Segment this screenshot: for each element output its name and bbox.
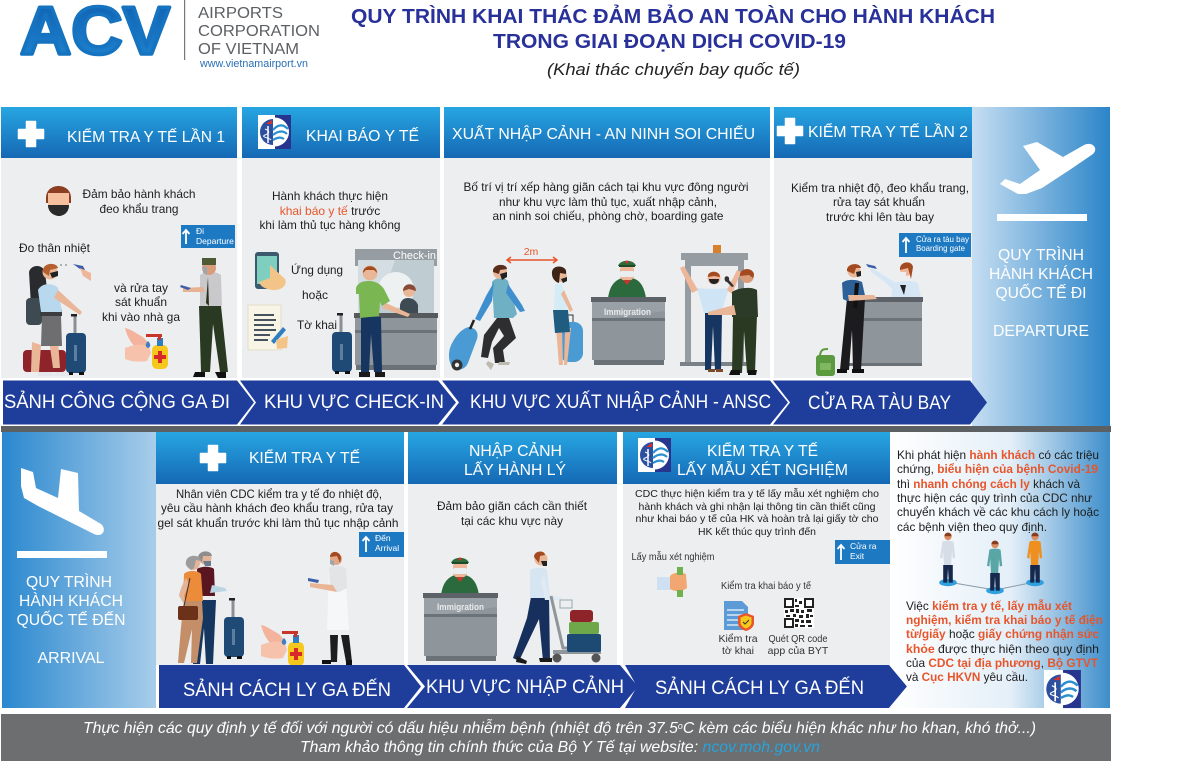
footer notice [1, 714, 1111, 761]
sign: exit: Exit [850, 551, 865, 561]
panel: khai bao y te: KHAI BÁO Y TẾ [306, 126, 419, 145]
figure: traveler with thermometer [23, 264, 91, 376]
chevron: khu vuc check-in [240, 380, 456, 424]
chevron: sanh cach ly ga den 2: SẢNH CÁCH LY GA ĐẾN [655, 677, 864, 699]
text block: regulations [906, 598, 1103, 684]
panel: arrival side label: QUY TRÌNH [26, 574, 112, 591]
panel: khai bao y te [242, 107, 440, 378]
figure: doctor [308, 552, 352, 665]
sign: departure: Đi [196, 226, 204, 236]
figure: staff with thermometer [866, 262, 921, 297]
text block: detection notes: chứng, biểu hiện của bệnh Covid-19 [897, 462, 1098, 476]
panel: departure side label: DEPARTURE [993, 323, 1089, 340]
sign: boarding gate: Cửa ra tàu bay [916, 234, 970, 244]
panel: kiem tra y te lan 1: Đo thân nhiệt [19, 241, 91, 255]
panel: nhap canh lay hanh ly [408, 432, 617, 665]
icon: cross [200, 446, 226, 470]
figure: woman with luggage [552, 266, 583, 365]
figure: man with luggage [449, 265, 525, 370]
icon: declaration form [248, 305, 288, 350]
text block: detection notes: thì nhanh chóng cách ly khách và [897, 477, 1080, 491]
text block: regulations: nghiệm, kiểm tra khai báo y tế điện [906, 613, 1103, 627]
panel: kiem tra y te lan 1: và rửa tay [114, 281, 168, 295]
panel: kiem tra y te lan 2: Kiểm tra nhiệt độ, đeo khẩu trang, [791, 181, 969, 195]
chevron: sanh cach ly ga den [159, 665, 421, 708]
icon: QR code [784, 598, 814, 628]
title: QUY TRÌNH KHAI THÁC ĐẢM BẢO AN TOÀN CHO HÀNH KHÁCH [351, 5, 995, 28]
icon: departing plane [1000, 142, 1095, 194]
panel: kiem tra y te lay mau xet nghiem: tờ khai [722, 645, 754, 657]
text block: regulations: Việc kiểm tra y tế, lấy mẫu xét [906, 598, 1072, 613]
panel: kiem tra y te lan 2: trước khi lên tàu bay [826, 210, 934, 224]
chevron: sanh cach ly ga den: SẢNH CÁCH LY GA ĐẾN [183, 679, 391, 701]
panel: kiem tra y te lay mau xet nghiem: như khai báo y tế của HK và hoàn trả lại giấy tờ cho [636, 513, 879, 525]
panel: kiem tra y te lan 2: rửa tay sát khuẩn [833, 195, 925, 209]
text block: detection notes: thực hiện các quy trình của CDC như [897, 491, 1092, 505]
text block: detection notes: các bệnh viện theo quy định. [897, 520, 1047, 534]
footer notice: C kèm các biểu hiện khác như ho khan, khó thở...) [683, 719, 1036, 737]
title: TRONG GIAI ĐOẠN DỊCH COVID-19 [493, 31, 846, 53]
icon: arriving plane [21, 468, 104, 535]
panel: arrival side label: HÀNH KHÁCH [19, 593, 123, 610]
panel: kiem tra y te den: Nhân viên CDC kiểm tra y tế đo nhiệt độ, [176, 487, 382, 501]
panel: kiem tra y te lan 2: KIỂM TRA Y TẾ LẦN 2 [808, 122, 968, 141]
chevron: khu vuc nhap canh [407, 665, 638, 708]
panel: departure side label: HÀNH KHÁCH [989, 266, 1093, 283]
chevron: khu vuc xuat nhap canh: KHU VỰC XUẤT NHẬP CẢNH - ANSC [470, 391, 771, 413]
icon: cross [778, 118, 802, 144]
panel: kiem tra y te lay mau xet nghiem: Lấy mẫu xét nghiệm [632, 550, 714, 563]
icon: hand washing [125, 328, 168, 369]
panel: kiem tra y te lan 1: đeo khẩu trang [100, 202, 178, 216]
title [351, 5, 995, 53]
header: ACV logo: CORPORATION [198, 23, 320, 40]
panel: kiem tra y te lay mau xet nghiem: hành khách và ghi nhận lại thông tin cần thiết cũng [638, 501, 876, 513]
panel: kiem tra y te lay mau xet nghiem: Quét QR code [768, 633, 828, 645]
immigration desk: Immigration [437, 602, 484, 612]
footer notice: Thực hiện các quy định y tế đối với người có dấu hiệu nhiễm bệnh (nhiệt độ trên 37.5 [83, 720, 686, 737]
panel: xuat nhap canh - an ninh soi chieu: an ninh soi chiếu, phòng chờ, boarding gate [492, 209, 724, 223]
figure: three isolated people [939, 533, 1044, 594]
panel: kiem tra y te lan 1: khi vào nhà ga [102, 310, 180, 324]
panel: kiem tra y te den [156, 432, 404, 666]
panel: arrival side label [2, 432, 156, 708]
figure: passenger at check-in [356, 266, 410, 377]
panel: kiem tra y te lan 2 [774, 107, 972, 378]
panel: kiem tra y te lay mau xet nghiem: app của BYT [768, 645, 829, 657]
text block: regulations: và Cục HKVN yêu cầu. [906, 670, 1028, 684]
icon: hand washing [261, 625, 304, 666]
panel: kiem tra y te den: gel sát khuẩn trước khi làm thủ tục nhập cảnh [158, 516, 398, 530]
text block: detection notes: Khi phát hiện hành khách có các triệu [897, 448, 1099, 462]
chevron: khu vuc xuat nhap canh [442, 380, 788, 424]
check-in counter: Check-in [393, 250, 436, 262]
text block: detection notes [897, 448, 1099, 534]
panel: xuat nhap canh - an ninh soi chieu: như khu vực làm thủ tục, xuất nhập cảnh, [499, 195, 717, 209]
chevron: cua ra tau bay [773, 380, 987, 424]
chevron: sanh cach ly ga den 2 [625, 665, 907, 708]
figure: security officer [708, 269, 758, 375]
text block: regulations: khỏe được thực hiện theo quy định [906, 642, 1099, 656]
panel: kiem tra y te lay mau xet nghiem [623, 432, 890, 665]
panel: xuat nhap canh - an ninh soi chieu: Bố trí vị trí xếp hàng giãn cách tại khu vực đông người [464, 180, 748, 194]
panel: kiem tra y te lan 1: KIỂM TRA Y TẾ LẦN 1 [67, 127, 225, 146]
panel: nhap canh lay hanh ly: LẤY HÀNH LÝ [464, 460, 566, 479]
panel: xuat nhap canh - an ninh soi chieu: XUẤT NHẬP CẢNH - AN NINH SOI CHIẾU [452, 124, 755, 143]
panel: kiem tra y te lay mau xet nghiem: CDC thực hiện kiểm tra y tế lấy mẫu xét nghiệm cho [635, 487, 879, 500]
panel: kiem tra y te lay mau xet nghiem: HK kết thúc quy trình đến [698, 526, 816, 538]
panel: departure side label [972, 107, 1110, 427]
panel: nhap canh lay hanh ly: NHẬP CẢNH [469, 441, 562, 460]
panel: khai bao y te: hoặc [302, 288, 328, 302]
sign: exit: Cửa ra [850, 541, 877, 551]
panel: khai bao y te: khi làm thủ tục hàng không [260, 218, 400, 232]
panel: kiem tra y te lay mau xet nghiem: Kiểm tra [718, 633, 758, 645]
icon: swab hand [657, 567, 687, 597]
panel: departure side label: QUỐC TẾ ĐI [996, 284, 1086, 302]
panel: kiem tra y te den: KIỂM TRA Y TẾ [249, 448, 360, 467]
figure: guard [180, 258, 228, 378]
immigration desk: Immigration [604, 307, 651, 317]
panel: arrival side label: ARRIVAL [38, 650, 105, 667]
sign: arrival: Arrival [375, 543, 399, 553]
panel: kiem tra y te den: yêu cầu hành khách đeo khẩu trang, rửa tay [161, 501, 393, 515]
chevron: khu vuc nhap canh: KHU VỰC NHẬP CẢNH [426, 676, 624, 698]
immigration desk [423, 558, 498, 661]
panel: nhap canh lay hanh ly: tại các khu vực này [461, 514, 563, 528]
panel: arrival side label: QUỐC TẾ ĐẾN [16, 611, 126, 629]
icon: suitcase [224, 598, 244, 659]
panel: departure side label: QUY TRÌNH [998, 247, 1084, 264]
figure: passenger at gate [837, 264, 877, 373]
header: ACV logo [20, 0, 320, 70]
chevron: khu vuc check-in: KHU VỰC CHECK-IN [264, 392, 444, 413]
figure: elderly couple [178, 551, 227, 664]
chevron: cua ra tau bay: CỬA RA TÀU BAY [808, 392, 951, 414]
panel: kiem tra y te lay mau xet nghiem: KIỂM TRA Y TẾ [707, 441, 818, 460]
security gate [680, 245, 748, 366]
header: ACV logo: www.vietnamairport.vn [199, 58, 308, 70]
text block: regulations: từ/giấy hoặc giấy chứng nhận sức [906, 627, 1099, 641]
icon: ministry of health logo [638, 438, 671, 472]
footer notice: o [678, 721, 683, 731]
icon: phone [255, 252, 286, 290]
panel: khai bao y te: Hành khách thực hiện [272, 189, 388, 203]
chevron: sanh cong cong ga di [3, 380, 254, 424]
panel: khai bao y te: Tờ khai [297, 318, 337, 332]
chevron: sanh cong cong ga di: SẢNH CÔNG CỘNG GA ĐI [4, 391, 230, 413]
icon: green bag [816, 349, 835, 376]
icon: ministry of health logo [1044, 670, 1081, 708]
text block: detection notes: chuyển khách về các khu cách ly hoặc [897, 505, 1099, 519]
panel: khai bao y te: Ứng dụng [291, 262, 343, 277]
figure: man with cart [513, 551, 562, 664]
subtitle: (Khai thác chuyến bay quốc tế) [547, 60, 800, 79]
arrow: 2m distance [507, 246, 557, 263]
check-in counter [354, 249, 438, 370]
icon: suitcase [332, 313, 352, 374]
icon: suitcase [66, 314, 86, 375]
panel: kiem tra y te lan 1 [1, 107, 237, 378]
icon: ministry of health logo [258, 115, 291, 149]
panel: kiem tra y te lan 1: sát khuẩn [115, 295, 167, 309]
text block: regulations: của CDC tại địa phương, Bộ GTVT [906, 656, 1099, 670]
icon: baggage cart [551, 596, 601, 662]
sign: exit [835, 540, 890, 564]
sign: boarding gate: Boarding gate [916, 243, 965, 253]
figure: scanned passenger [680, 266, 741, 372]
panel: kiem tra y te lay mau xet nghiem: Kiểm tra khai báo y tế [721, 580, 811, 592]
panel: xuat nhap canh - an ninh soi chieu [444, 107, 770, 378]
footer notice: Tham khảo thông tin chính thức của Bộ Y Tế tại website: ncov.moh.gov.vn [300, 739, 820, 756]
panel: kiem tra y te lan 1: Đảm bảo hành khách [82, 187, 196, 201]
header: ACV logo: AIRPORTS [198, 5, 283, 22]
header: ACV logo: OF VIETNAM [198, 41, 299, 58]
panel: nhap canh lay hanh ly: Đảm bảo giãn cách cần thiết [437, 499, 588, 513]
icon: checked form [724, 601, 754, 631]
panel: khai bao y te: khai báo y tế trước [280, 204, 380, 218]
sign: arrival: Đến [375, 533, 391, 543]
panel: kiem tra y te lay mau xet nghiem: LẤY MẪU XÉT NGHIỆM [677, 460, 848, 479]
desk [848, 297, 923, 366]
sign: boarding gate [899, 233, 971, 257]
icon: cross [18, 122, 44, 146]
sign: departure: Departure [196, 236, 234, 246]
icon: masked face [46, 186, 71, 216]
arrow: 2m distance: 2m [524, 246, 539, 258]
immigration desk [591, 260, 666, 365]
panel: isolation notes [889, 432, 1110, 708]
sign: departure [181, 225, 235, 248]
divider bar [1, 426, 1111, 432]
sign: arrival [359, 532, 404, 557]
